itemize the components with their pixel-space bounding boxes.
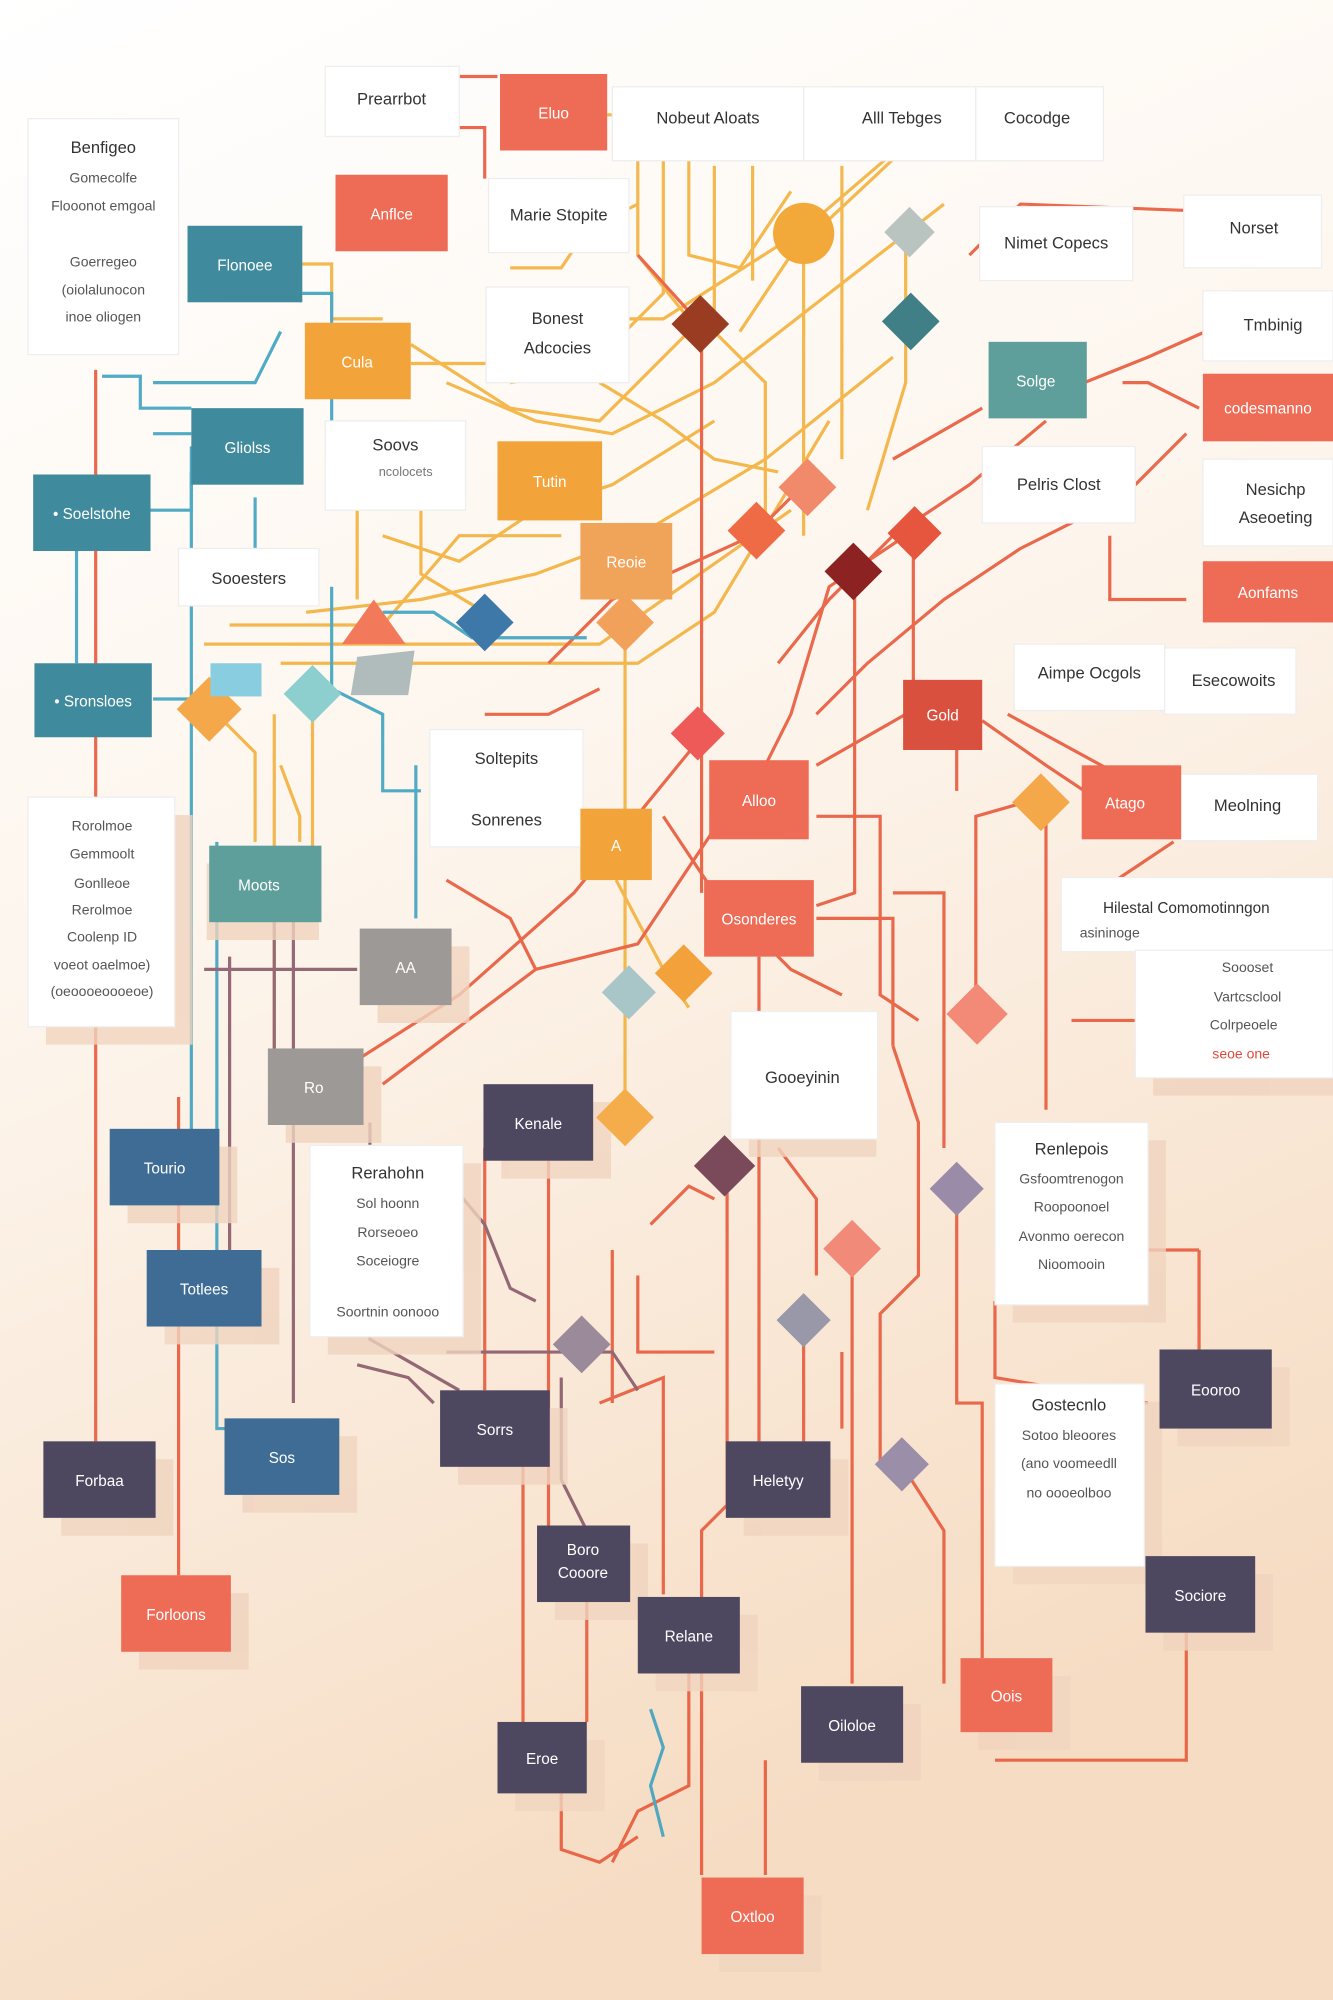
white label text: Avonmo oerecon <box>1019 1228 1124 1244</box>
colored node boxes: Ro <box>304 1080 324 1097</box>
white label text <box>51 90 1312 1500</box>
colored node boxes: Flonoee <box>217 257 273 274</box>
white label text: Rorolmoe <box>72 817 133 833</box>
white label text: Gemmoolt <box>70 845 134 861</box>
diamonds <box>177 203 1070 1491</box>
colored node boxes: Sos <box>269 1450 295 1467</box>
colored node boxes: codesmanno <box>1224 400 1312 417</box>
colored node boxes: Forbaa <box>75 1473 124 1490</box>
colored node boxes: Eluo <box>538 106 569 123</box>
white label text: Marie Stopite <box>510 206 608 225</box>
white label text: Norset <box>1229 218 1279 237</box>
colored node boxes: Aonfams <box>1238 585 1298 602</box>
colored node boxes: Boro <box>567 1542 599 1559</box>
colored node boxes: AA <box>395 960 417 977</box>
colored node boxes: Eroe <box>526 1751 558 1768</box>
colored node boxes: Heletyy <box>753 1473 804 1490</box>
white label boxes <box>28 66 1333 1566</box>
colored node boxes: Reoie <box>606 555 646 572</box>
colored node boxes: • Soelstohe <box>53 506 131 523</box>
white label text: Cocodge <box>1004 109 1070 128</box>
white label text: Goerregeo <box>70 254 137 270</box>
white label text: (ano voomeedll <box>1021 1455 1117 1471</box>
white label text: Sotoo bleoores <box>1022 1427 1116 1443</box>
white label text: Soceiogre <box>356 1252 420 1268</box>
white label text: Gooeyinin <box>765 1068 840 1087</box>
colored node boxes: Eooroo <box>1191 1382 1240 1399</box>
colored node boxes: Totlees <box>180 1282 229 1299</box>
white label text: Soooset <box>1222 959 1273 975</box>
white label text: Nioomooin <box>1038 1256 1105 1272</box>
white label text: Coolenp ID <box>67 928 137 944</box>
white label text: no oooeolboo <box>1026 1484 1112 1500</box>
colored node boxes: Tourio <box>144 1160 185 1177</box>
colored node boxes: A <box>611 838 622 855</box>
white label text: Vartcsclool <box>1214 988 1281 1004</box>
shadows <box>46 815 1333 1972</box>
colored node boxes: Oxtloo <box>730 1909 775 1926</box>
colored node boxes: Forloons <box>146 1607 206 1624</box>
white label text: Rerolmoe <box>72 902 133 918</box>
colored node boxes: Relane <box>665 1629 713 1646</box>
white label text: Renlepois <box>1035 1139 1108 1158</box>
white label text: (oeoooeoooeoe) <box>51 983 153 999</box>
colored node boxes: Osonderes <box>722 912 797 929</box>
white label text: Bonest <box>532 309 584 328</box>
white label text: Rerahohn <box>351 1164 424 1183</box>
white label text: Sonrenes <box>471 810 542 829</box>
connector lines <box>77 77 1205 1875</box>
white label text: Meolning <box>1214 796 1281 815</box>
white label text: Sol hoonn <box>356 1195 419 1211</box>
white label text: Adcocies <box>524 338 591 357</box>
white label text: inoe oliogen <box>66 308 141 324</box>
colored node boxes: Oois <box>991 1689 1023 1706</box>
colored node boxes: Cula <box>341 354 373 371</box>
white label text: Soltepits <box>475 749 538 768</box>
white label text: Alll Tebges <box>862 109 942 128</box>
white label text: Soovs <box>372 435 418 454</box>
colored node boxes: Moots <box>238 877 280 894</box>
white label text: Nimet Copecs <box>1004 234 1108 253</box>
white label text: Tmbinig <box>1244 315 1303 334</box>
colored node boxes: Atago <box>1105 796 1145 813</box>
white label text: Aimpe Ocgols <box>1038 664 1141 683</box>
white label text: Nobeut Aloats <box>656 109 760 128</box>
colored node boxes: Solge <box>1016 373 1055 390</box>
colored node boxes: Alloo <box>742 793 776 810</box>
colored node boxes: Sociore <box>1174 1588 1226 1605</box>
white label text: Esecowoits <box>1192 671 1275 690</box>
colored node boxes: Gliolss <box>225 440 271 457</box>
white label text: Colrpeoele <box>1210 1016 1278 1032</box>
white label text: Roopoonoel <box>1034 1199 1109 1215</box>
white label text: Pelris Clost <box>1017 475 1101 494</box>
white label text: Gostecnlo <box>1032 1396 1106 1415</box>
white label text: seoe one <box>1212 1046 1270 1062</box>
white label text: voeot oaelmoe) <box>54 956 150 972</box>
colored node boxes: Oiloloe <box>828 1718 876 1735</box>
colored node boxes: Cooore <box>558 1565 608 1582</box>
colored node boxes: Gold <box>927 708 959 725</box>
colored node boxes: Sorrs <box>477 1422 514 1439</box>
white label text: (oiolalunocon <box>62 282 145 298</box>
white label text: Flooonot emgoal <box>51 197 156 213</box>
colored node boxes: Kenale <box>514 1116 562 1133</box>
white label text: Gsfoomtrenogon <box>1019 1171 1124 1187</box>
white label text: Nesichp <box>1246 480 1306 499</box>
white label text: Prearrbot <box>357 90 427 109</box>
white label text: Sooesters <box>211 569 286 588</box>
white label text: Gomecolfe <box>69 169 137 185</box>
colored node boxes: Anflce <box>370 206 413 223</box>
colored node boxes: • Sronsloes <box>54 694 132 711</box>
white label text: Soortnin oonooo <box>336 1303 439 1319</box>
white label text: Gonlleoe <box>74 875 130 891</box>
white label text: ncolocets <box>379 464 433 479</box>
white label text: Rorseoeo <box>357 1224 418 1240</box>
white label text: Hilestal Comomotinngon <box>1103 900 1270 917</box>
white label text: Aseoeting <box>1239 508 1312 527</box>
white label text: Benfigeo <box>71 138 136 157</box>
colored node boxes: Tutin <box>533 474 567 491</box>
white label text: asininoge <box>1080 925 1140 940</box>
